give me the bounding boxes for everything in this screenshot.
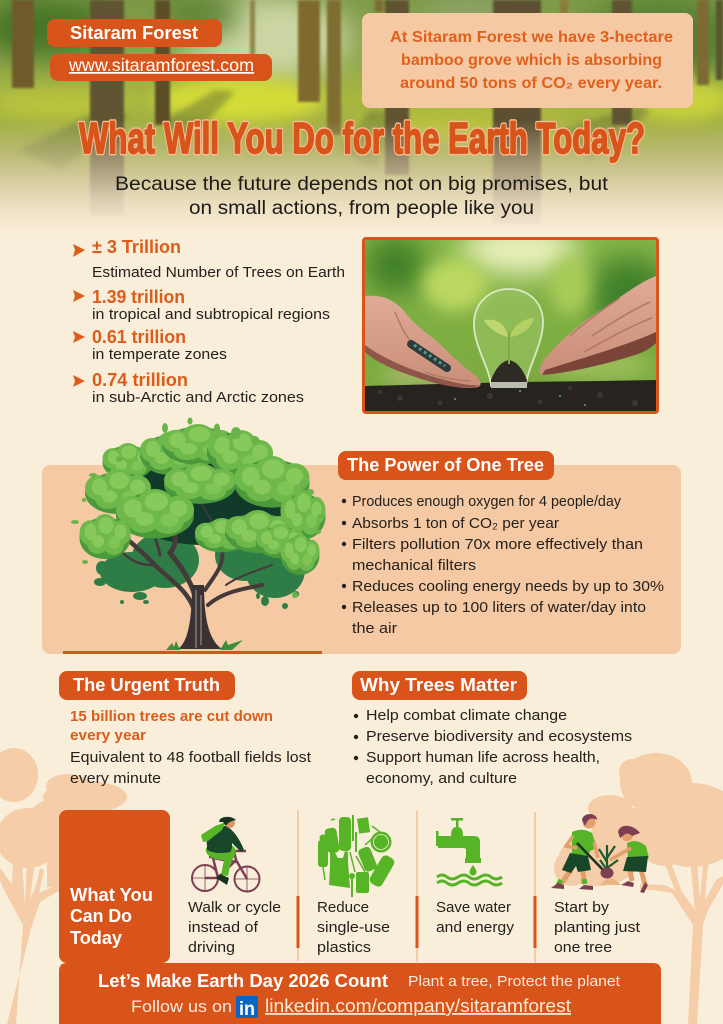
stat: temperate: [73, 327, 227, 363]
footer banner: Let’s Make Earth Day 2026 Count: [98, 971, 388, 991]
forest: shadow streaks: [20, 90, 650, 170]
list: why trees matter: Help combat climate change: [366, 707, 567, 724]
panel: what you can do today: Today: [70, 928, 122, 948]
text: urgent truth: every minute: [70, 770, 161, 787]
boy: [561, 870, 584, 884]
label: walk or cycle: [188, 899, 281, 956]
list: tree benefits: Produces enough oxygen for 4 people/day: [352, 493, 621, 510]
stat: tropical: 1.39 trillion: [92, 287, 185, 307]
stat: tropical: in tropical and subtropical regions: [92, 306, 330, 323]
panel: what you can do today: [59, 810, 170, 963]
website pill: [50, 54, 272, 81]
silhouette: left tree: [0, 748, 127, 1024]
list: why trees matter: economy, and culture: [366, 770, 517, 787]
silhouette: right tree: [554, 753, 723, 1024]
list: tree benefits: Reduces cooling energy needs by up to 30%: [352, 578, 664, 595]
footer banner: [59, 963, 661, 1024]
text: urgent truth: 15 billion trees are cut down: [70, 709, 273, 725]
girl: [630, 870, 645, 884]
callout: bamboo grove: At Sitaram Forest we have 3-hectare: [390, 29, 673, 46]
tree: grass: [166, 640, 243, 650]
dividers: [298, 810, 535, 963]
list: why trees matter: Preserve biodiversity and ecosystems: [366, 728, 632, 745]
heading pill: the urgent truth: The Urgent Truth: [73, 675, 220, 695]
subtitle: Because the future depends not on big promises, but: [115, 174, 609, 195]
heading pill: why trees matter: [352, 671, 527, 700]
label: reduce plastics: plastics: [317, 939, 371, 956]
icon: person cycling: [192, 817, 260, 892]
text: urgent truth: [70, 709, 312, 787]
brand pill: [47, 19, 222, 47]
stats list: [73, 237, 345, 406]
brand pill: Sitaram Forest: [70, 23, 198, 43]
callout: bamboo grove: [362, 13, 693, 108]
heading pill: the power of one tree: [338, 451, 554, 480]
stat: arctic: in sub-Arctic and Arctic zones: [92, 389, 304, 406]
label: save water: [436, 899, 515, 936]
text: urgent truth: every year: [70, 728, 146, 744]
left hand: [365, 296, 481, 388]
bulb: [474, 289, 543, 386]
stat: total trees: [73, 237, 345, 281]
subtitle: [115, 174, 609, 219]
list: tree benefits: mechanical filters: [352, 557, 476, 574]
illustration: tree: [71, 418, 326, 650]
stat: tropical: [73, 287, 330, 323]
stat: total trees: Estimated Number of Trees on Earth: [92, 264, 345, 281]
icon: children planting a tree: [551, 814, 649, 893]
soil: [365, 380, 656, 411]
text: urgent truth: Equivalent to 48 football fields lost: [70, 749, 312, 766]
label: walk or cycle: Walk or cycle: [188, 899, 281, 916]
right hand: [540, 276, 656, 375]
label: save water: and energy: [436, 919, 515, 936]
label: plant a tree: [554, 899, 641, 956]
heading pill: why trees matter: Why Trees Matter: [360, 675, 517, 695]
label: save water: Save water: [436, 899, 511, 916]
tree: leaf clusters: [102, 443, 154, 480]
label: plant a tree: planting just: [554, 919, 641, 936]
tree: trunk and branches: [122, 497, 272, 610]
icon: linkedin: in: [239, 999, 255, 1020]
stat: temperate: in temperate zones: [92, 346, 227, 363]
callout: bamboo grove: around 50 tons of CO₂ every year.: [400, 75, 662, 92]
website pill: www.sitaramforest.com: [68, 55, 254, 75]
photo: seedling in light bulb with hands: [362, 226, 670, 414]
label: plant a tree: Start by: [554, 899, 610, 916]
icon: single-use plastics: [318, 815, 396, 897]
stat: arctic: 0.74 trillion: [92, 370, 188, 390]
label: reduce plastics: Reduce: [317, 899, 369, 916]
label: reduce plastics: single-use: [317, 919, 390, 936]
labels: actions: [188, 899, 641, 956]
label: walk or cycle: driving: [188, 939, 235, 956]
tree: back foliage: [94, 529, 310, 609]
label: plant a tree: one tree: [554, 939, 612, 956]
subtitle: on small actions, from people like you: [189, 198, 534, 219]
list: tree benefits: Releases up to 100 liters of water/day into: [352, 599, 646, 616]
callout: bamboo grove: bamboo grove which is absorbing: [401, 52, 662, 69]
heading pill: the urgent truth: [59, 671, 235, 700]
icon: water tap: [436, 818, 502, 885]
label: walk or cycle: instead of: [188, 919, 259, 936]
panel: what you can do today: What You: [70, 885, 153, 905]
list: tree benefits: Absorbs 1 ton of CO₂ per year: [352, 515, 559, 532]
forest header photo: [0, 0, 723, 235]
list: tree benefits: the air: [352, 620, 397, 637]
list: tree benefits: [342, 493, 664, 637]
panel: the power of one tree: [42, 465, 681, 654]
heading pill: the power of one tree: The Power of One Tree: [347, 455, 544, 475]
list: tree benefits: Filters pollution 70x more effectively than: [352, 536, 643, 553]
footer banner: linkedin.com/company/sitaramforest: [265, 996, 571, 1016]
tree: loose leaves: [71, 418, 323, 598]
stat: temperate: 0.61 trillion: [92, 327, 186, 347]
tree: dark interior: [113, 449, 297, 545]
stat: total trees: ± 3 Trillion: [92, 237, 181, 257]
icon: linkedin: [236, 996, 258, 1020]
label: reduce plastics: [317, 899, 390, 956]
list: why trees matter: [354, 707, 632, 787]
footer banner: Plant a tree, Protect the planet: [408, 974, 620, 990]
panel: what you can do today: Can Do: [70, 906, 132, 926]
footer banner: Follow us on: [131, 997, 232, 1016]
list: why trees matter: Support human life across health,: [366, 749, 600, 766]
stat: arctic: [73, 370, 304, 406]
